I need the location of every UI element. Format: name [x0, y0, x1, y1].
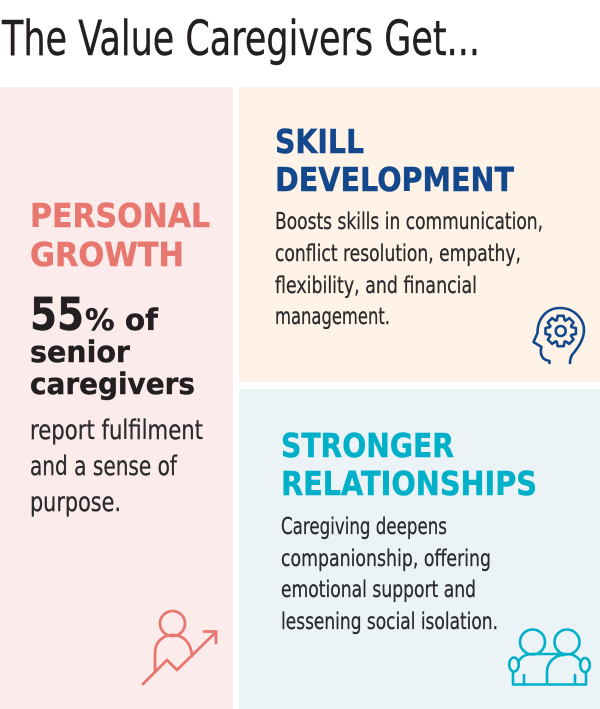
- heading: stronger relationships: [281, 426, 537, 503]
- text: relationships description: [281, 512, 498, 635]
- statistic: 55% of senior caregivers: [30, 288, 195, 401]
- text: report fulfilment: purpose.: [30, 487, 121, 518]
- statistic: 55% of senior caregivers: senior: [30, 335, 131, 369]
- text: skills description: [275, 207, 543, 330]
- statistic: 55% of senior caregivers: caregivers: [30, 367, 195, 401]
- heading: personal growth: [30, 196, 210, 274]
- text: relationships description: emotional support and: [281, 575, 476, 603]
- text: skills description: flexibility, and financial: [275, 271, 477, 299]
- text: report fulfilment: [30, 415, 203, 518]
- heading: skill development: DEVELOPMENT: [275, 160, 514, 199]
- heading: personal growth: PERSONAL: [30, 196, 210, 235]
- icon: two people: [509, 630, 590, 684]
- icon: person with rising arrow: [143, 611, 216, 684]
- statistic: 55% of senior caregivers: 55: [30, 288, 84, 341]
- text: relationships description: companionship, offering: [281, 544, 491, 572]
- text: report fulfilment: report fulfilment: [30, 415, 203, 446]
- heading: skill development: [275, 122, 514, 199]
- panel: personal growth: [0, 87, 233, 709]
- text: relationships description: lessening social isolation.: [281, 607, 498, 635]
- heading: skill development: SKILL: [275, 122, 364, 161]
- text: report fulfilment: and a sense of: [30, 451, 177, 482]
- text: relationships description: Caregiving deepens: [281, 512, 447, 540]
- panel: stronger relationships: [239, 389, 600, 709]
- text: skills description: management.: [275, 302, 390, 330]
- heading: stronger relationships: STRONGER: [281, 426, 454, 465]
- panel: skill development: [239, 87, 600, 382]
- statistic: 55% of senior caregivers: % of: [85, 303, 158, 337]
- icon: head with gear: [534, 308, 584, 363]
- heading: personal growth: GROWTH: [30, 235, 184, 274]
- heading: stronger relationships: RELATIONSHIPS: [281, 464, 537, 503]
